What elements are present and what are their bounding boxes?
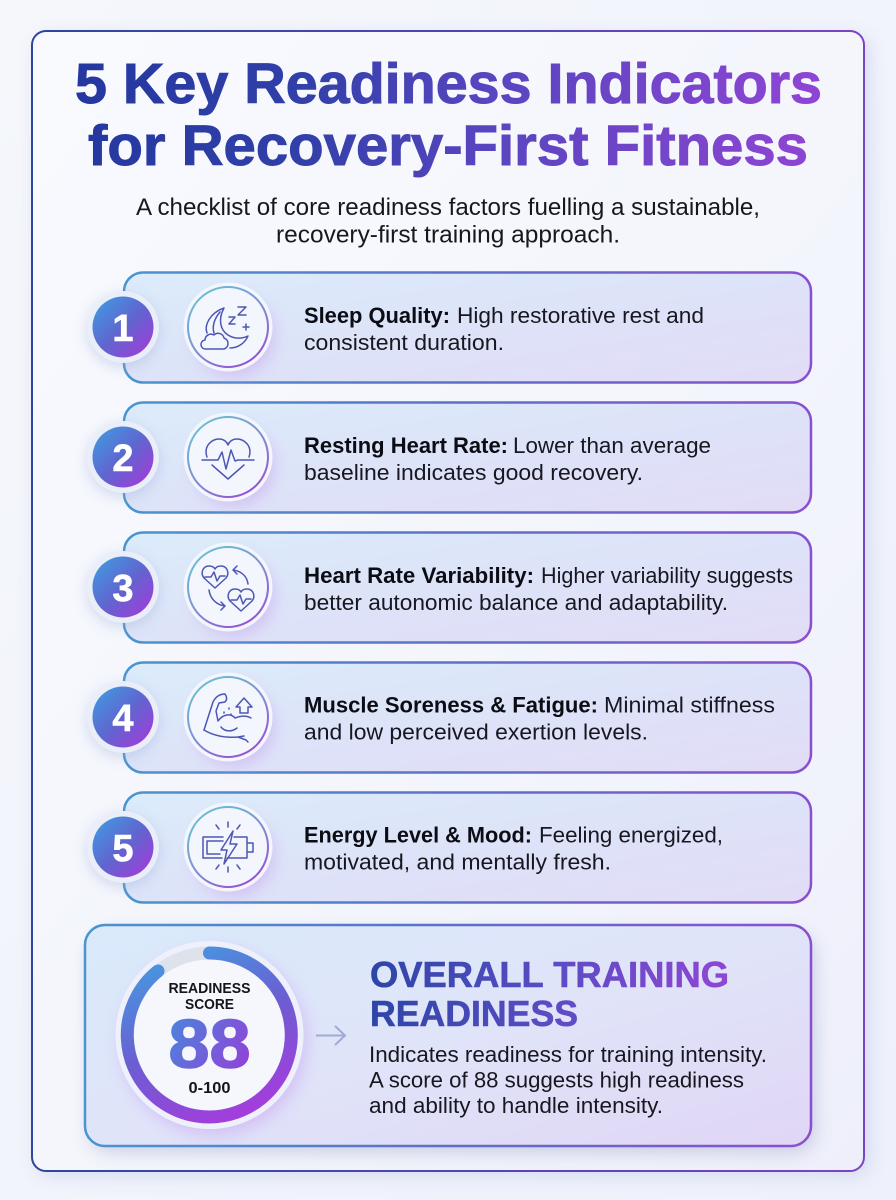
readiness score gauge: 0-100 [188,1080,231,1097]
text: resting heart rate: Lower than average [513,433,711,458]
heading: overall training readiness [370,954,729,1034]
text: score explanation: and ability to handle intensity. [369,1093,663,1118]
number badge 5 [87,811,159,887]
text: energy level and mood: Energy Level & Mood: [304,822,532,848]
text: resting heart rate: Resting Heart Rate: [304,433,508,458]
text: heart rate variability: better autonomic balance and adaptability. [304,590,728,615]
icon: battery with lightning bolt [184,802,276,897]
icon: flexed arm with up arrow [184,672,276,767]
text: sleep quality [304,303,704,355]
text: resting heart rate: baseline indicates good recovery. [304,460,643,485]
readiness score gauge: 88 [168,1006,250,1082]
panel: indicator 4 muscle soreness [87,662,811,772]
number badge 2 [87,421,159,497]
panel: indicator 2 resting heart rate [87,402,811,512]
number badge 5: 5 [112,828,134,870]
icon: two hearts with cycle arrows [184,542,276,637]
panel: indicator 5 energy and mood [87,792,811,902]
panel: indicator 3 heart rate variability [87,532,811,642]
number badge 1: 1 [112,308,134,350]
title [75,52,822,178]
text: energy level and mood: Feeling energized, [539,822,723,848]
icon: heart with pulse [184,412,276,507]
text: energy level and mood [304,822,723,874]
number badge 4 [87,681,159,757]
panel: overall training readiness [85,925,814,1152]
number badge 3 [87,551,159,627]
text: heart rate variability [304,563,793,615]
text: score explanation: A score of 88 suggests high readiness [369,1068,744,1092]
heading: overall training readiness: OVERALL TRAINING [370,954,729,995]
text: muscle soreness and fatigue: Minimal stiffness [604,692,775,718]
number badge 2: 2 [112,438,134,480]
text: muscle soreness and fatigue: and low perceived exertion levels. [304,720,648,744]
subtitle: recovery-first training approach. [276,222,620,248]
text: muscle soreness and fatigue: Muscle Soreness & Fatigue: [304,692,598,718]
text: heart rate variability: Higher variability suggests [541,563,793,588]
title: for Recovery-First Fitness [88,114,808,178]
text: resting heart rate [304,433,711,485]
readiness score gauge: READINESS [168,981,251,997]
text: sleep quality: consistent duration. [304,330,504,355]
subtitle [136,194,760,248]
text: energy level and mood: motivated, and mentally fresh. [304,850,611,874]
readiness score gauge: SCORE [185,997,234,1013]
heading: overall training readiness: READINESS [370,993,578,1034]
readiness score gauge [116,941,306,1134]
text: score explanation [369,1042,767,1118]
subtitle: A checklist of core readiness factors fuelling a sustainable, [136,194,760,221]
panel: indicator 1 sleep quality [87,272,811,382]
text: sleep quality: High restorative rest and [457,303,704,328]
text: score explanation: Indicates readiness for training intensity. [369,1042,767,1067]
icon: moon and cloud [184,282,276,377]
number badge 3: 3 [112,568,134,610]
number badge 4: 4 [112,698,134,740]
text: sleep quality: Sleep Quality: [304,303,450,328]
title: 5 Key Readiness Indicators [75,52,822,116]
text: heart rate variability: Heart Rate Variability: [304,563,534,588]
text: muscle soreness and fatigue [304,692,775,744]
arrow [316,1026,345,1045]
number badge 1 [87,291,159,367]
